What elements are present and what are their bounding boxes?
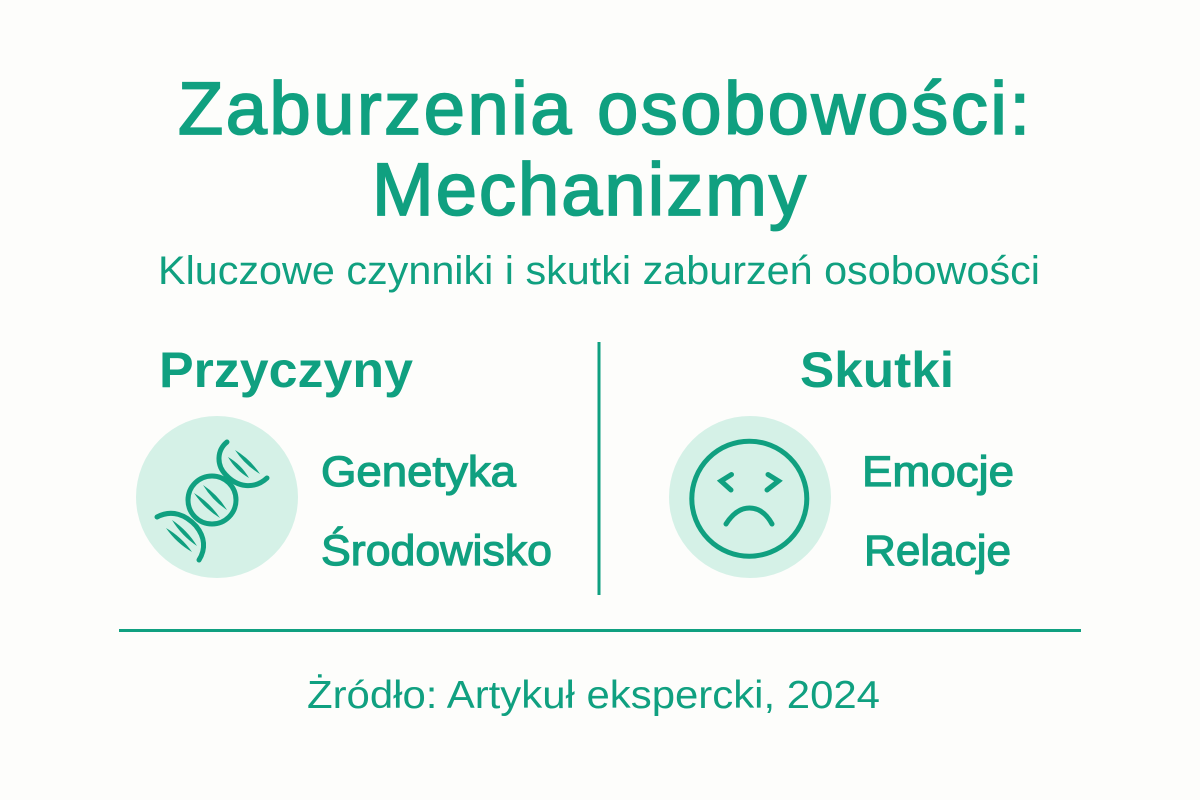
- title: Zaburzenia osobowości:: [178, 67, 1030, 150]
- panel: effects: [669, 342, 1014, 578]
- label: Środowisko: Środowisko: [321, 526, 552, 575]
- panel: causes: [136, 342, 552, 578]
- title: Mechanizmy: [372, 148, 806, 231]
- title: [178, 67, 1030, 231]
- heading: effects: Skutki: [800, 342, 954, 398]
- icon: sad face: [669, 416, 831, 578]
- subtitle: Kluczowe czynniki i skutki zaburzeń osobowości: [158, 249, 1040, 293]
- label: Genetyka: Genetyka: [321, 448, 516, 496]
- label: Emocje: Emocje: [862, 448, 1014, 496]
- heading: causes: Przyczyny: [159, 342, 413, 398]
- source note: Żródło: Artykuł ekspercki, 2024: [307, 674, 880, 717]
- icon: DNA helix: [136, 416, 298, 578]
- label: Relacje: Relacje: [864, 527, 1011, 575]
